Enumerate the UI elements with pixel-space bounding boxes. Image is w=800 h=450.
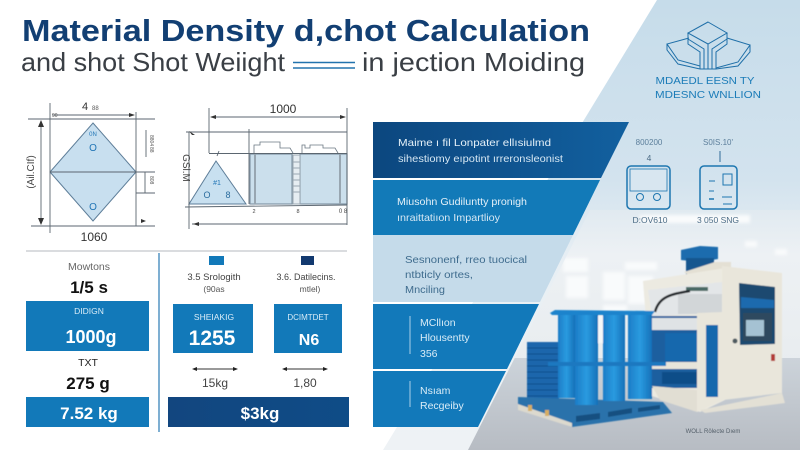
diagram: diamond cross-section: 90 [52, 113, 58, 119]
machine interior [651, 316, 701, 388]
note 4: MCllıon [420, 317, 456, 329]
panel: right results column: (90as [203, 284, 225, 294]
injection molding machine [518, 246, 785, 427]
device label top: S0IS.10' [703, 138, 733, 147]
machine door frame [697, 312, 723, 412]
machine upper opening [648, 282, 722, 316]
card: dcimtdet [274, 304, 342, 353]
hose [655, 291, 690, 312]
dimension top: 4 [82, 101, 88, 113]
photo caption: WOLL Rölecte Dıem [686, 429, 740, 435]
legend swatch navy [301, 256, 314, 265]
dimension left: GSl.M [180, 154, 191, 182]
note 4: 356 [420, 348, 438, 360]
note 3: Sesnonenf, rreo tuocical [405, 254, 527, 266]
divider: column separator [158, 253, 160, 432]
spec: left device [627, 138, 670, 225]
spec: right device [697, 138, 739, 225]
card: design [26, 301, 149, 351]
card: shrinkage [173, 304, 253, 353]
diamond shape [50, 123, 136, 221]
title divider [293, 62, 355, 68]
card: design: DIDIGN [74, 306, 104, 316]
logo caption: MDESNC WNLLION [655, 89, 761, 101]
title [21, 13, 590, 77]
note 1: Maime ı fil Lonpater ellısiulmd [398, 137, 551, 149]
device label bottom: D:OV610 [633, 215, 668, 225]
note 1 [373, 122, 629, 178]
card: design: 1000g [65, 327, 117, 347]
label: txt: TXT [78, 357, 98, 369]
triangle labels: #1 [213, 180, 221, 187]
title line 2 left: and shot Shot Weiight [21, 47, 286, 77]
title line 1: Material Density d,chot Calculation [22, 13, 590, 48]
card: dcimtdet: N6 [299, 332, 319, 349]
blue stock unit [518, 310, 672, 427]
logo caption: MDAEDL EESN TY [656, 75, 754, 87]
machine bed [652, 386, 722, 412]
diagram: mold layout: 8 [225, 190, 231, 200]
right background panel [383, 0, 800, 450]
arrow right [282, 367, 328, 371]
card: shrinkage: SHEIAKIG [194, 312, 234, 322]
diagram: diamond cross-section [26, 101, 155, 244]
pallet [518, 397, 672, 427]
machine cabinet [722, 266, 782, 400]
device label top: 800200 [636, 138, 663, 147]
panel: left results column [26, 261, 149, 427]
note 3 [373, 235, 573, 302]
legend text right: 3.6. Datilecins. [276, 272, 336, 282]
diagram: diamond cross-section: O [89, 202, 97, 213]
legend text left: 3.5 Srologith [187, 272, 241, 283]
value: 275 g: 275 g [66, 374, 110, 393]
top clamp unit [681, 246, 731, 276]
card: 7.52 kg [26, 397, 149, 427]
note 2 [373, 180, 600, 235]
diagram: mold layout: 0 8 [339, 209, 348, 215]
louvre box [527, 342, 559, 402]
card: 7.52 kg: 7.52 kg [60, 404, 118, 423]
icon: density cube logo [667, 22, 750, 69]
tank right [300, 154, 347, 204]
tank fittings [254, 142, 338, 153]
note 4: Hlousentty [420, 332, 470, 344]
stock columns [558, 313, 575, 398]
note 3: ntbticly ortes, [405, 269, 473, 281]
diamond labels: 0N [89, 132, 97, 138]
legend swatch blue [209, 256, 224, 265]
machine frame [643, 268, 725, 412]
icon: control panel [627, 166, 670, 209]
stock mid rail [548, 362, 666, 366]
arrow left [192, 367, 238, 371]
divider: results table top [26, 250, 347, 252]
note 2: ınraittatiıon Impartlioy [397, 212, 501, 224]
note 3: Mnciling [405, 284, 445, 296]
stock top plate [550, 310, 655, 315]
label: mowtons: Mowtons [68, 261, 110, 273]
dimension left: (Ail.CIf) [26, 155, 37, 189]
note 2: Miusohn Gudiluntty pronigh [397, 196, 527, 208]
factory photo backdrop [460, 205, 800, 450]
control panel [732, 283, 775, 361]
tick labels: 2 [252, 209, 256, 215]
total bar [168, 397, 349, 427]
diagram: diamond cross-section: 88 [148, 147, 154, 153]
diagram: diamond cross-section: O [89, 143, 97, 154]
machine feet [700, 393, 785, 413]
card: dcimtdet: DCIMTDET [287, 313, 329, 322]
panel: right results column [168, 256, 349, 427]
icon: control unit [700, 166, 737, 209]
tank left [250, 154, 292, 204]
value: 1/5 s: 1/5 s [70, 278, 108, 297]
diagram: diamond cross-section: 88 [92, 106, 99, 112]
device label bottom: 3 050 SNG [697, 215, 739, 225]
dimension bottom: 1060 [81, 230, 108, 244]
note 4 [373, 304, 539, 369]
diagram: diamond cross-section: 808 [148, 176, 154, 185]
diagram: mold layout: 8 [296, 209, 300, 215]
panel: notes stack [373, 122, 629, 427]
title line 2 right: in jection Moiding [362, 47, 585, 77]
note 1: sihestiomy eıpotint ırreronsleonist [398, 153, 563, 165]
total bar: $3kg [241, 404, 279, 423]
note 5: Recgeiby [420, 400, 465, 412]
panel: right results column: mtlel) [300, 284, 321, 294]
dimension top: 1000 [270, 102, 297, 116]
ladder [293, 155, 300, 204]
triangle [189, 161, 246, 204]
diagram: mold layout: O [203, 190, 211, 200]
dimension right: 8804 [148, 135, 154, 146]
diagram: mold layout [180, 102, 348, 229]
value 15kg: 15kg [202, 376, 228, 390]
note 5 [373, 371, 506, 427]
card: shrinkage: 1255 [189, 327, 236, 350]
logo caption [655, 75, 761, 101]
spec: left device: 4 [647, 153, 652, 163]
value 1,80: 1,80 [293, 376, 317, 390]
note 5: Nsıam [420, 385, 451, 397]
